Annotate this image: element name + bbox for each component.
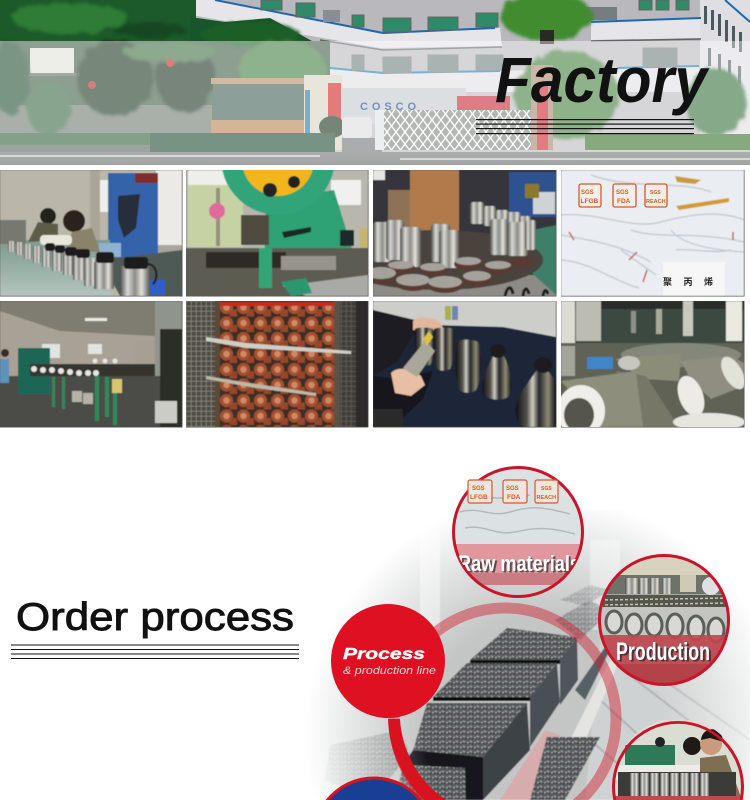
red connector ring [388, 602, 622, 800]
photo: stainless flask bodies on turntable [333, 170, 556, 296]
label: SGS FDA [503, 480, 527, 503]
heading: Order process: Order process [16, 596, 294, 639]
caption: Production: Production [616, 638, 710, 666]
photo: raw material sacks with certification labels [561, 170, 744, 296]
label: SGS FDA: FDA [507, 494, 521, 501]
label: SGS LFGB: SGS [472, 486, 485, 492]
label: REACH [645, 184, 667, 207]
photo: green punch press [186, 101, 368, 296]
label: SGS LFGB: LFGB [580, 198, 598, 205]
battery rows: far background [325, 585, 610, 800]
battery: top row [470, 628, 578, 705]
road and hedges [0, 133, 750, 165]
shipping container with COSCO logo: COSCO [360, 101, 416, 113]
label: REACH: REACH [536, 495, 556, 501]
label: SGS FDA: FDA [617, 198, 631, 205]
battery: front row [395, 703, 530, 800]
low white building behind trees [28, 48, 80, 76]
translucent banner overlay [0, 41, 750, 165]
faded production-line background photo [290, 510, 750, 800]
gatehouse, shop and pillar [211, 75, 345, 150]
label: SGS LFGB: LFGB [470, 494, 488, 501]
caption: Raw materials: Raw materials [460, 552, 582, 578]
label: REACH: SGS [541, 486, 552, 492]
heading underline rules [476, 119, 694, 134]
circle: production [596, 552, 732, 688]
photo: workers assembling vacuum flasks [0, 170, 182, 296]
sack print: 聚丙烯 [663, 276, 713, 287]
trees [0, 0, 746, 139]
label: REACH [535, 480, 558, 503]
label: SGS LFGB [468, 480, 492, 503]
circle: process and production line title [331, 604, 445, 718]
shipping container with COSCO logo [342, 88, 466, 124]
caption: Production: Production [618, 640, 712, 668]
photo: inspector testing flasks with meter [373, 301, 556, 428]
subtitle: production line: & production line [343, 665, 436, 677]
order process underline rules [11, 644, 299, 659]
circle: raw materials [450, 465, 586, 600]
circle: blue badge, cropped at page bottom [326, 776, 422, 800]
photo: factory hall and production line [0, 301, 182, 428]
label: SGS LFGB: SGS [581, 190, 594, 196]
caption: Production [617, 642, 711, 662]
label: REACH: SGS [650, 190, 661, 196]
tree canopy base [0, 0, 330, 136]
hero photo: factory building with translucent banner [0, 0, 750, 165]
caption: Raw materials [459, 555, 576, 572]
label: SGS LFGB [579, 184, 601, 207]
photo: warehouse with steel coils [557, 301, 750, 437]
white van [342, 117, 372, 138]
circle: assembly workers [612, 720, 744, 800]
caption: Raw materials: Raw materials [458, 551, 580, 576]
heading: Factory: Factory [495, 44, 710, 116]
photo: rack of copper flask bases [186, 301, 368, 428]
title: Process: Process [343, 646, 425, 663]
building facade [180, 0, 750, 165]
tree details: trunk and blossoms [88, 30, 554, 133]
folding gate and gate pillar [375, 65, 553, 150]
red truck [457, 96, 510, 116]
label: SGS FDA: SGS [506, 486, 519, 492]
label: SGS FDA: SGS [616, 190, 629, 196]
battery: middle row [433, 663, 560, 747]
label: REACH: REACH [646, 199, 666, 205]
label: SGS FDA [613, 184, 636, 207]
battery: lower right [530, 737, 600, 800]
